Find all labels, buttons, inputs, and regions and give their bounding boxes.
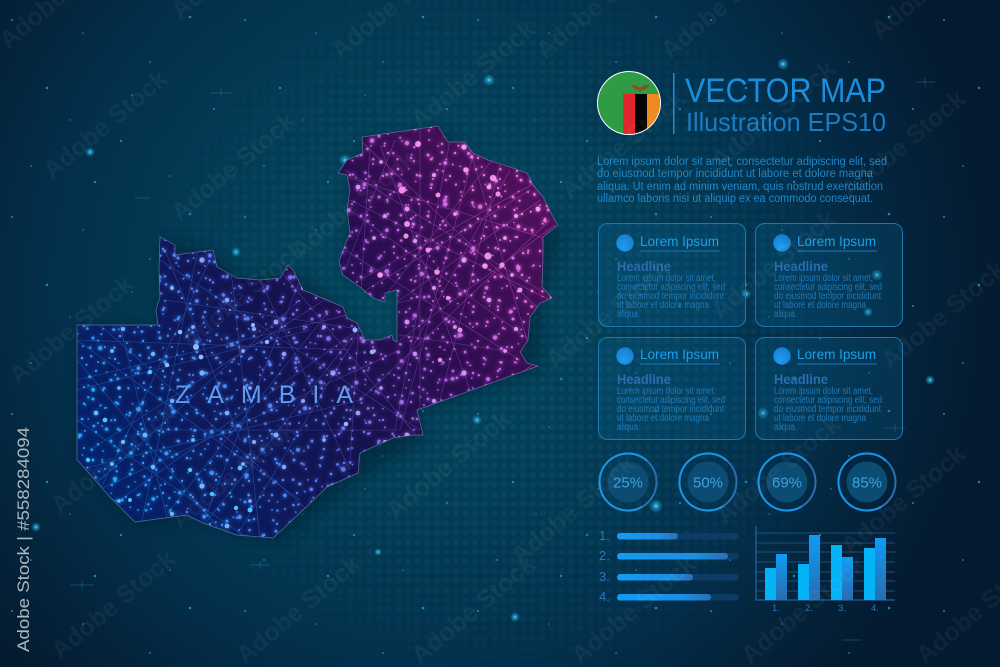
subtitle: Illustration EPS10 — [686, 107, 886, 137]
card 4: do eiusmod tempor incididunt — [774, 404, 881, 415]
card 4: Lorem ipsum dolor sit amet, — [774, 386, 873, 397]
watermark: Adobe Stock — [166, 415, 301, 535]
map label: ZAMBIA: ZAMBIA — [175, 381, 353, 409]
gauge 69% — [748, 443, 826, 521]
watermark: Adobe Stock — [556, 85, 691, 205]
card 3: Lorem ipsum dolor sit amet, — [617, 386, 716, 397]
card 4 — [756, 338, 902, 440]
progress bars: 3. — [599, 569, 610, 584]
gauge 25% — [589, 443, 667, 521]
card 2 — [756, 224, 902, 326]
progress bars: 1. — [599, 528, 610, 543]
column chart: 3. — [838, 603, 846, 614]
card 4: aliqua. — [774, 422, 797, 433]
watermark: Adobe Stock — [176, 235, 311, 355]
title: VECTOR MAP: VECTOR MAP — [685, 72, 886, 110]
stock credit: Adobe Stock | #558284094 — [14, 427, 33, 652]
card 4: consectetur adipiscing elit, sed — [774, 395, 882, 406]
gauge 50% — [669, 443, 747, 521]
card 3: do eiusmod tempor incididunt — [617, 404, 724, 415]
watermark: Adobe Stock — [706, 205, 841, 325]
card 4: ut labore et dolore magna — [774, 413, 866, 424]
watermark: Adobe Stock — [566, 550, 701, 667]
gauge 50%: 50% — [693, 474, 723, 492]
card 3: Headline — [617, 371, 671, 387]
card 2: Lorem ipsum dolor sit amet, — [774, 273, 873, 284]
watermark: Adobe Stock — [506, 450, 641, 570]
card 3: aliqua. — [617, 422, 640, 433]
progress bars: 2. — [599, 548, 610, 563]
watermark: Adobe Stock — [406, 15, 541, 135]
map shadow — [80, 130, 561, 542]
card 2: Lorem Ipsum — [797, 233, 876, 249]
watermark: Adobe Stock — [46, 400, 181, 520]
intro paragraph: do eiusmod tempor incididunt ut labore et dolore magna — [597, 168, 874, 180]
watermark: Adobe Stock — [381, 405, 516, 525]
card 1: do eiusmod tempor incididunt — [617, 291, 724, 302]
watermark: Adobe Stock — [286, 145, 421, 265]
watermark: Adobe Stock — [711, 410, 846, 530]
gauge 69%: 69% — [772, 474, 802, 492]
intro paragraph: Lorem ipsum dolor sit amet, consectetur adipiscing elit, sed — [597, 156, 887, 168]
card 1: Headline — [617, 258, 671, 274]
watermark: Adobe Stock — [736, 550, 871, 667]
gauge 85% — [828, 443, 906, 521]
column chart: 2. — [805, 603, 813, 614]
card 1: Lorem Ipsum — [640, 233, 719, 249]
card 3: ut labore et dolore magna — [617, 413, 709, 424]
watermark: Adobe Stock — [46, 545, 181, 665]
card 1: consectetur adipiscing elit, sed — [617, 282, 725, 293]
watermark: Adobe Stock — [38, 65, 173, 185]
watermark: Adobe Stock — [836, 440, 971, 560]
map fill — [77, 126, 558, 538]
progress bars — [599, 528, 739, 604]
title divider — [673, 73, 674, 134]
watermark: Adobe Stock — [4, 270, 139, 390]
gauge 85%: 85% — [852, 474, 882, 492]
card 2: consectetur adipiscing elit, sed — [774, 282, 882, 293]
column chart — [756, 526, 895, 614]
card 2: ut labore et dolore magna — [774, 300, 866, 311]
flag of Zambia — [597, 71, 661, 136]
gauge 25%: 25% — [613, 474, 643, 492]
watermark: Adobe Stock — [166, 107, 301, 227]
card 3: Lorem Ipsum — [640, 346, 719, 362]
watermark: Adobe Stock — [406, 550, 541, 667]
watermark: Adobe Stock — [836, 85, 971, 205]
watermark: Adobe Stock — [231, 550, 366, 667]
progress bars: 4. — [599, 589, 610, 604]
intro paragraph — [597, 156, 887, 205]
intro paragraph: aliqua. Ut enim ad minim veniam, quis nostrud exercitation — [597, 181, 883, 193]
intro paragraph: ullamco laboris nisi ut aliquip ex ea commodo consequat. — [597, 193, 873, 205]
card 3 — [598, 338, 746, 440]
card 2: aliqua. — [774, 309, 797, 320]
watermark: Adobe Stock — [541, 255, 676, 375]
card 4: Lorem Ipsum — [797, 346, 876, 362]
card 1 — [598, 224, 746, 326]
column chart: 4. — [871, 603, 879, 614]
network lines and light points — [77, 126, 556, 538]
card 1: Lorem ipsum dolor sit amet, — [617, 273, 716, 284]
card 3: consectetur adipiscing elit, sed — [617, 395, 725, 406]
watermark: Adobe Stock — [706, 55, 841, 175]
card 4: Headline — [774, 371, 828, 387]
column chart: 1. — [772, 603, 780, 614]
card 2: do eiusmod tempor incididunt — [774, 291, 881, 302]
card 1: aliqua. — [617, 309, 640, 320]
card 1: ut labore et dolore magna — [617, 300, 709, 311]
card 2: Headline — [774, 258, 828, 274]
map: Zambia — [76, 126, 562, 542]
